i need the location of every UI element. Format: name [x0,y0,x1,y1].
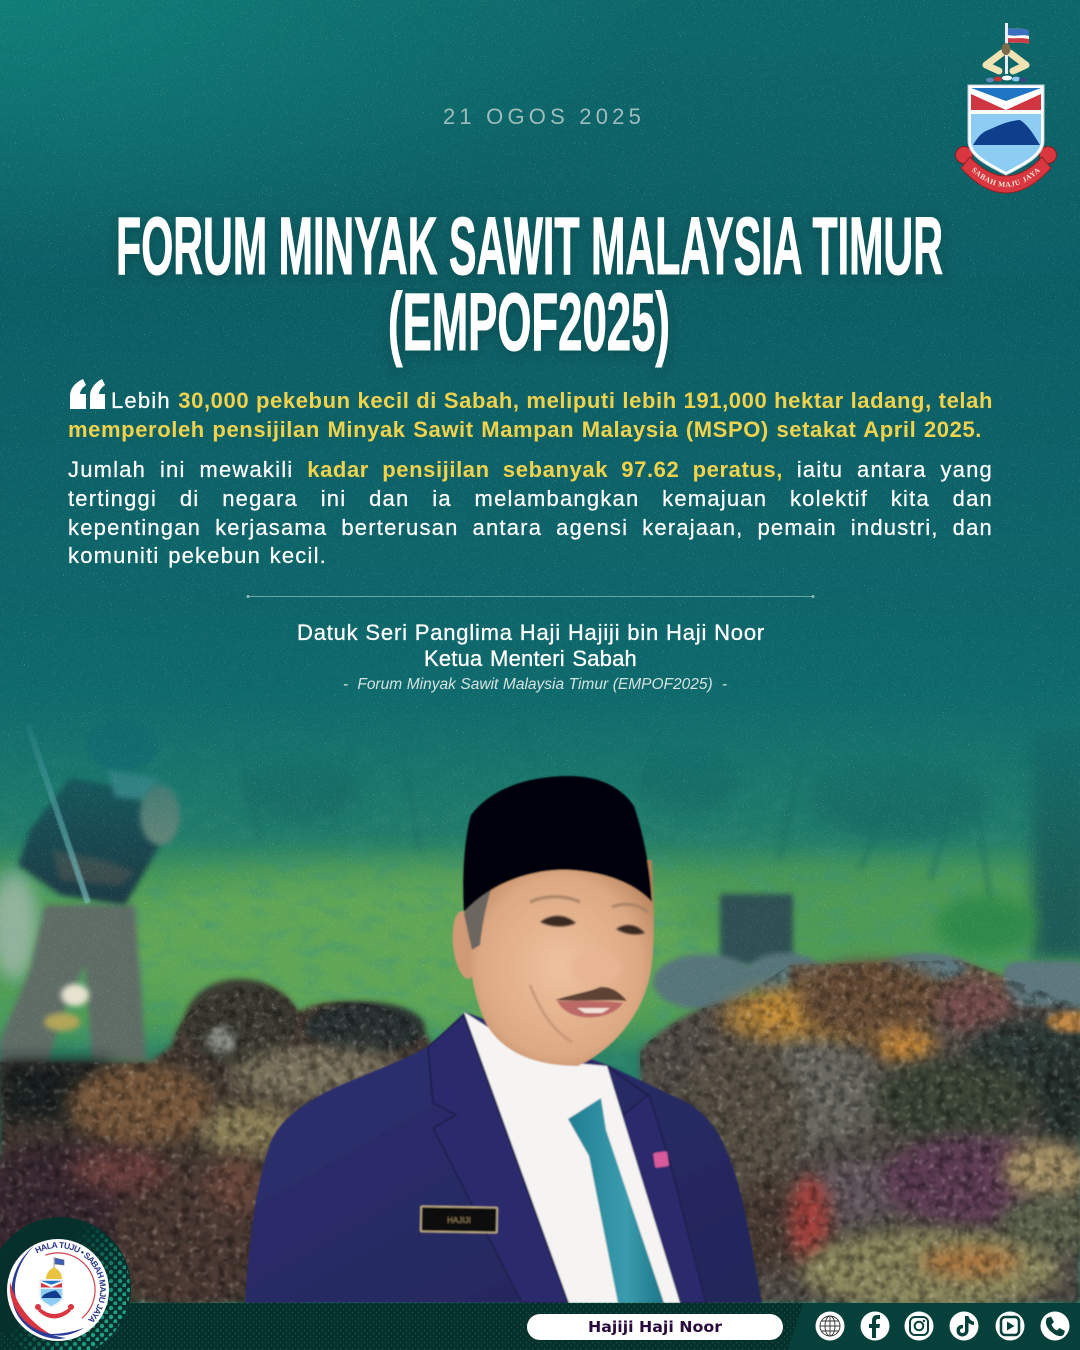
crest: flag [1005,23,1029,74]
crest: ribbon: SABAH MAJU JAYA [972,168,1040,188]
crest: arms [986,53,1026,71]
portrait: tie [568,1098,664,1303]
portrait: ear [450,910,480,980]
quote body paragraph: Jumlah ini mewakili kadar pensijilan sebanyak 97.62 peratus, iaitu antara yang [68,457,993,482]
icon: tiktok [950,1312,978,1340]
portrait: jacket [245,1012,762,1303]
portrait: lapels [428,1015,706,1303]
event name: - Forum Minyak Sawit Malaysia Timur (EMPOF2025) - [343,676,727,693]
portrait: shirt [464,1012,680,1303]
photo: box and tree trunk [720,730,1080,966]
icon: youtube [996,1312,1024,1340]
quote highlight paragraph: Lebih 30,000 pekebun kecil di Sabah, meliputi lebih 191,000 hektar ladang, telah [111,388,993,413]
quote body paragraph: komuniti pekebun kecil. [68,543,327,568]
icon: phone [1040,1312,1070,1340]
portrait: temple hair [464,886,492,950]
social icons [816,1312,1070,1340]
portrait: name badge [421,1206,497,1233]
portrait: facial features [530,897,648,1042]
photo: sacks overlay [883,955,1080,1006]
speaker position: Ketua Menteri Sabah [424,646,637,671]
portrait: songkok hat [463,776,652,912]
speckle texture [0,0,1080,1050]
icon: website globe [816,1312,844,1340]
quote body paragraph [68,457,993,568]
title: (EMPOF2025) [388,277,670,368]
photo: fruit piles right [678,960,1080,1310]
portrait: pink pin [653,1151,669,1168]
background photo: palm fruit harvest [0,690,1080,1310]
name pill: Hajiji Haji Noor [588,1318,723,1336]
photo: pile base [0,950,1080,1310]
photo: harvest worker [0,719,180,1075]
quote mark icon [70,379,105,409]
quote highlight paragraph: memperoleh pensijilan Minyak Sawit Mampan Malaysia (MSPO) setakat April 2025. [68,417,982,442]
crest: hands [1002,43,1010,55]
portrait: face [466,860,654,1066]
state crest: Sabah coat of arms [955,23,1057,194]
photo: fruit piles left [0,979,425,1305]
speaker name: Datuk Seri Panglima Haji Hajiji bin Haji Noor [297,620,765,645]
date: 21 OGOS 2025 [443,104,645,129]
divider line [246,595,814,598]
crest: wreath [986,76,1027,82]
portrait: Datuk Seri Hajiji [245,776,762,1303]
quote highlight paragraph [68,388,993,442]
photo: fruit texture [0,950,1080,1310]
bottom bar [0,1303,1080,1350]
badge: mini crest [35,1257,74,1318]
photo: vegetation and grass [0,690,1080,1310]
round badge: Hala Tuju Sabah Maju Jaya [0,1217,131,1350]
quote body paragraph: kepentingan kerjasama berterusan antara agensi kerajaan, pemain industri, dan [68,515,993,540]
round badge: Hala Tuju Sabah Maju Jaya: HALA TUJU • SABAH MAJU JAYA [34,1242,106,1322]
photo: grey sacks at back [653,953,1080,1012]
name pill [527,1314,783,1340]
icon: instagram [904,1312,934,1340]
crest: shield [968,85,1044,175]
title [116,201,943,368]
speaker attribution [297,620,765,693]
portrait: name badge: HAJIJI [447,1216,471,1225]
icon: facebook [860,1312,890,1340]
quote body paragraph: tertinggi di negara ini dan ia melambangkan kemajuan kolektif kita dan [68,486,993,511]
crest: ribbon [955,146,1057,194]
